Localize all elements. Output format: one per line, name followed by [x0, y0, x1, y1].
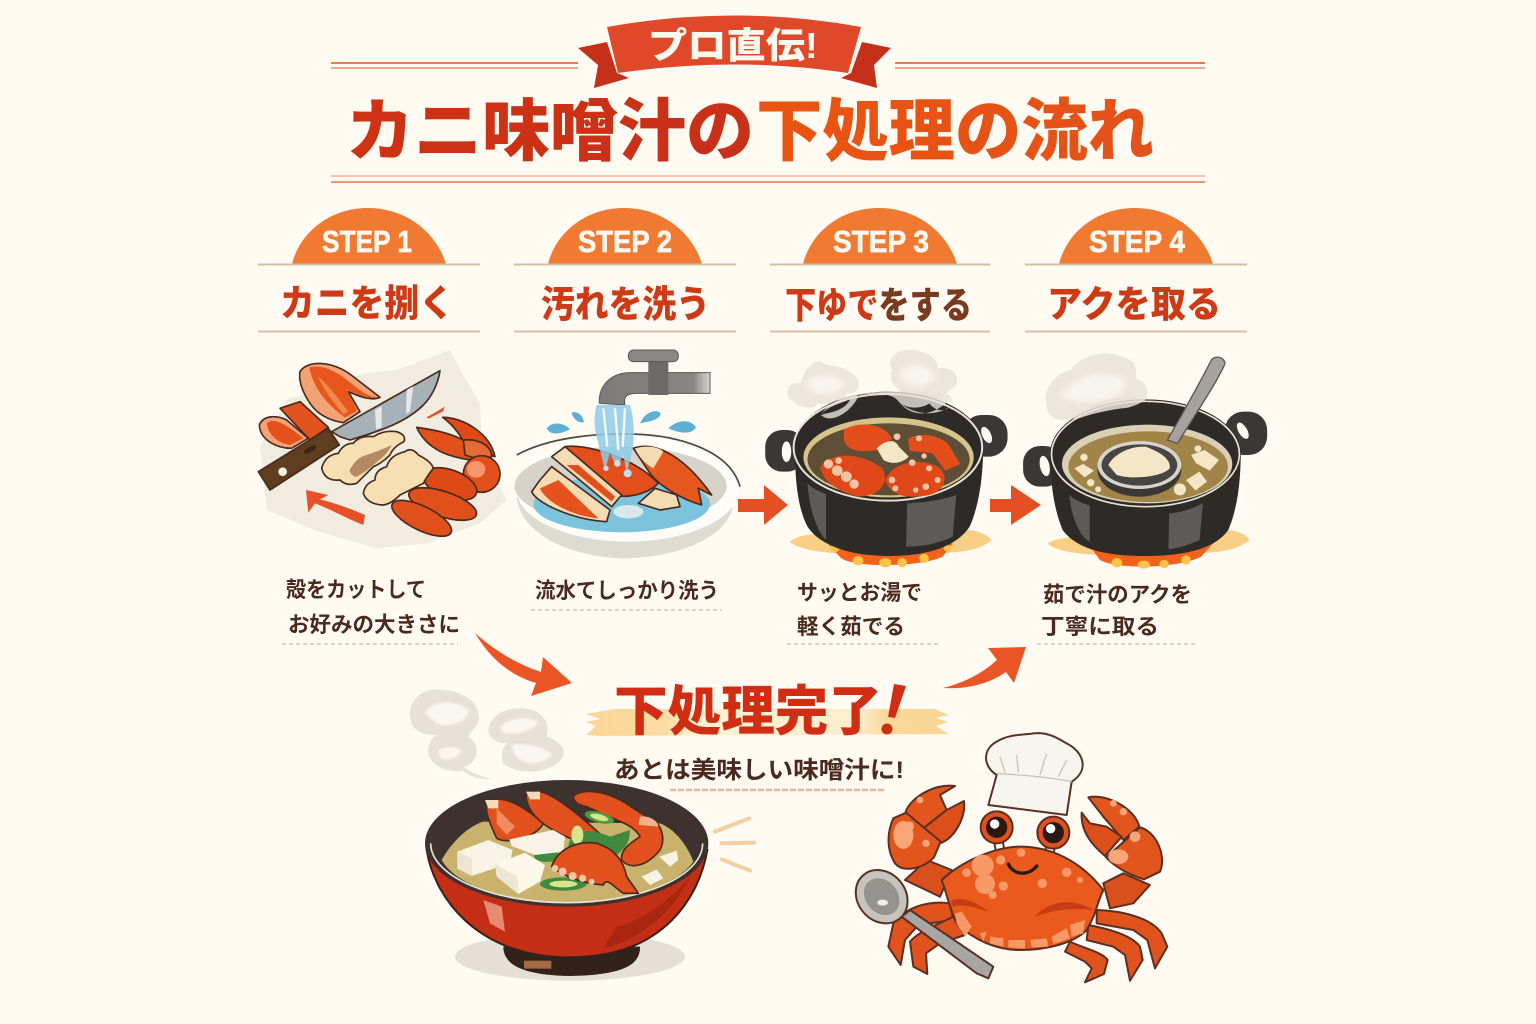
handles [1023, 446, 1062, 487]
curved arrow: to completion [475, 633, 572, 696]
step 1 header [258, 208, 480, 332]
icon: skimming scum from pot [1023, 353, 1267, 569]
step 1 caption: お好みの大きさに [288, 613, 460, 637]
steam over pot [1071, 397, 1147, 422]
red arrow [306, 490, 365, 525]
step 4 caption: 丁寧に取る [1041, 615, 1159, 639]
completion banner: 下処理完了 [614, 682, 882, 742]
ribbon: プロ直伝! [578, 16, 891, 88]
crab in pot [844, 425, 892, 451]
step 4 header: アクを取る [1047, 284, 1221, 325]
icon: miso soup bowl [410, 689, 754, 981]
crab body piece [552, 843, 638, 893]
step 1 header: カニを捌く [280, 283, 454, 324]
spoon [902, 910, 993, 978]
right claw [1103, 873, 1150, 908]
pot body [1050, 450, 1241, 556]
step 4 caption: 茹で汁のアクを [1043, 583, 1192, 607]
legs [888, 903, 953, 965]
foot [503, 947, 640, 976]
shadow [455, 933, 685, 981]
handles [765, 430, 804, 472]
completion subtext: あとは美味しい味噌汁に! [614, 757, 904, 784]
chef hat [986, 733, 1083, 815]
step 2 header: 汚れを洗う [541, 284, 710, 325]
sparkle lines [715, 818, 754, 871]
steam [1046, 353, 1147, 420]
title: カニ味噌汁の [346, 94, 754, 170]
crab pieces on plate [532, 467, 610, 522]
step 1 caption: 殻をカットして [286, 578, 426, 602]
step 1 header: STEP 1 [322, 224, 412, 259]
pot body [795, 445, 983, 556]
arrow: step 2 to step 3 [738, 485, 788, 525]
step 2 header [514, 208, 736, 332]
step 3 header: 下ゆでをする [785, 285, 972, 326]
tofu [509, 830, 565, 855]
claw spots [893, 797, 1140, 864]
header decorative rules [331, 63, 1205, 182]
step 3 caption: サッとお湯で [797, 581, 922, 605]
icon: cutting crab with knife [258, 350, 507, 548]
step 4 header: STEP 4 [1089, 224, 1186, 259]
arrow: step 3 to step 4 [990, 485, 1041, 525]
step 4 caption [1037, 583, 1195, 644]
steam [410, 689, 564, 779]
step 2 caption: 流水てしっかり洗う [535, 579, 719, 603]
step 3 caption [787, 581, 938, 644]
icon: crab chef mascot [845, 733, 1167, 982]
green onion [568, 830, 630, 855]
step 2 header: STEP 2 [578, 224, 672, 259]
water [595, 405, 634, 473]
step 3 header [770, 208, 990, 332]
faucet [599, 373, 710, 405]
step 3 caption: 軽く茹でる [797, 615, 905, 639]
step 3 header: STEP 3 [833, 224, 929, 259]
body [942, 847, 1103, 950]
title: 下処理の流れ [756, 94, 1154, 170]
icon: boiling pot with crab [765, 350, 1008, 567]
bowl [427, 850, 707, 957]
ribbon: プロ直伝!: プロ直伝! [648, 25, 818, 66]
steam over pot [821, 392, 953, 418]
step 4 header [1025, 208, 1247, 332]
eyes [981, 811, 1013, 843]
title [346, 94, 1154, 170]
crab meat [322, 431, 405, 484]
icon: washing crab under faucet [515, 350, 740, 558]
crab claws [486, 799, 543, 841]
spots [955, 848, 1085, 948]
knife [332, 371, 440, 440]
claw right [443, 417, 495, 457]
eye stalks [994, 842, 1055, 857]
soup [442, 822, 693, 903]
ladle [1167, 357, 1225, 443]
curved arrow: from completion [943, 647, 1026, 688]
left claw [905, 860, 952, 897]
step 1 caption [282, 578, 460, 644]
steam [787, 350, 957, 408]
